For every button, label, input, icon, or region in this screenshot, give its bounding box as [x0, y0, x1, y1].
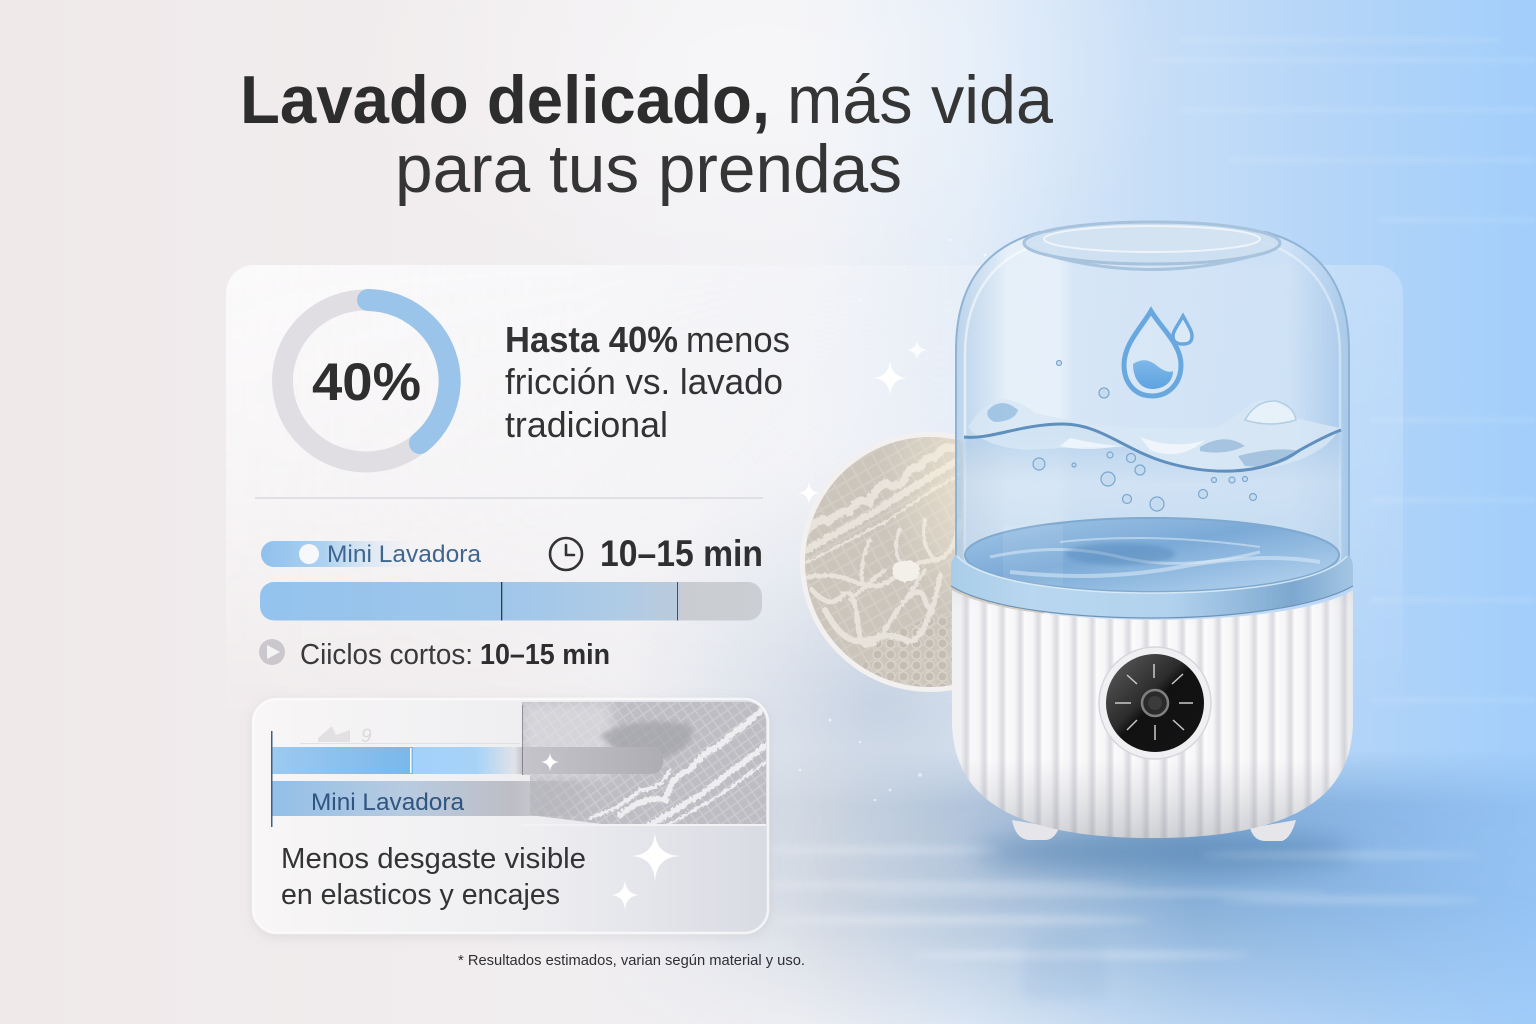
icon: water drops [1124, 311, 1192, 396]
faint ruler [300, 726, 520, 747]
time row: mini lavadora label [261, 541, 482, 568]
title: para tus prendas [395, 131, 902, 207]
title [240, 62, 1053, 207]
title: más vida [787, 62, 1053, 138]
ribbed white body [950, 585, 1355, 840]
donut chart: 40% [282, 300, 450, 462]
stat text: menos [686, 319, 790, 360]
comparison bar bottom: Mini Lavadora [311, 789, 465, 816]
short cycles note: Ciiclos cortos: [300, 639, 473, 671]
icon: small sparkle on bar [541, 753, 559, 771]
glass dome [956, 232, 1349, 575]
water in dome [964, 399, 1341, 575]
progress bar [260, 582, 762, 620]
short cycles note: 10–15 min [480, 639, 610, 671]
product: mini washing machine [950, 222, 1355, 841]
lace close-up circle [800, 432, 1050, 692]
panel: translucent card behind the product [226, 265, 1403, 552]
comparison bar top [272, 747, 663, 774]
short cycles note [259, 639, 610, 671]
water surface disc [965, 518, 1339, 592]
wear text: en elasticos y encajes [281, 879, 560, 911]
time row: mini lavadora label: Mini Lavadora [327, 541, 482, 568]
wear text: Menos desgaste visible [281, 843, 586, 875]
comparison bar bottom [272, 781, 590, 816]
background [654, 0, 1536, 1024]
stat text [505, 319, 790, 445]
stat text: Hasta 40% [505, 319, 678, 360]
donut chart: 40%: 40% [312, 353, 421, 412]
bubbles [1033, 360, 1256, 524]
icon: sparkles on card [611, 832, 680, 910]
stat text: tradicional [505, 404, 668, 445]
dome lid opening [1024, 222, 1280, 270]
stat text: fricción vs. lavado [505, 361, 783, 402]
icon: sparkles around lace [798, 340, 928, 504]
panel: less wear card [253, 699, 768, 933]
title: Lavado delicado, [240, 62, 770, 138]
feet [1012, 820, 1296, 841]
time value: 10–15 min [600, 533, 763, 574]
icon: clock [550, 538, 582, 570]
blue ring band [951, 554, 1353, 618]
lace texture strip [522, 702, 766, 825]
wear text [281, 843, 586, 911]
control knob [1099, 647, 1211, 759]
footnote: * Resultados estimados, varian según material y uso. [458, 952, 805, 969]
faint ruler: 9 [361, 726, 372, 747]
